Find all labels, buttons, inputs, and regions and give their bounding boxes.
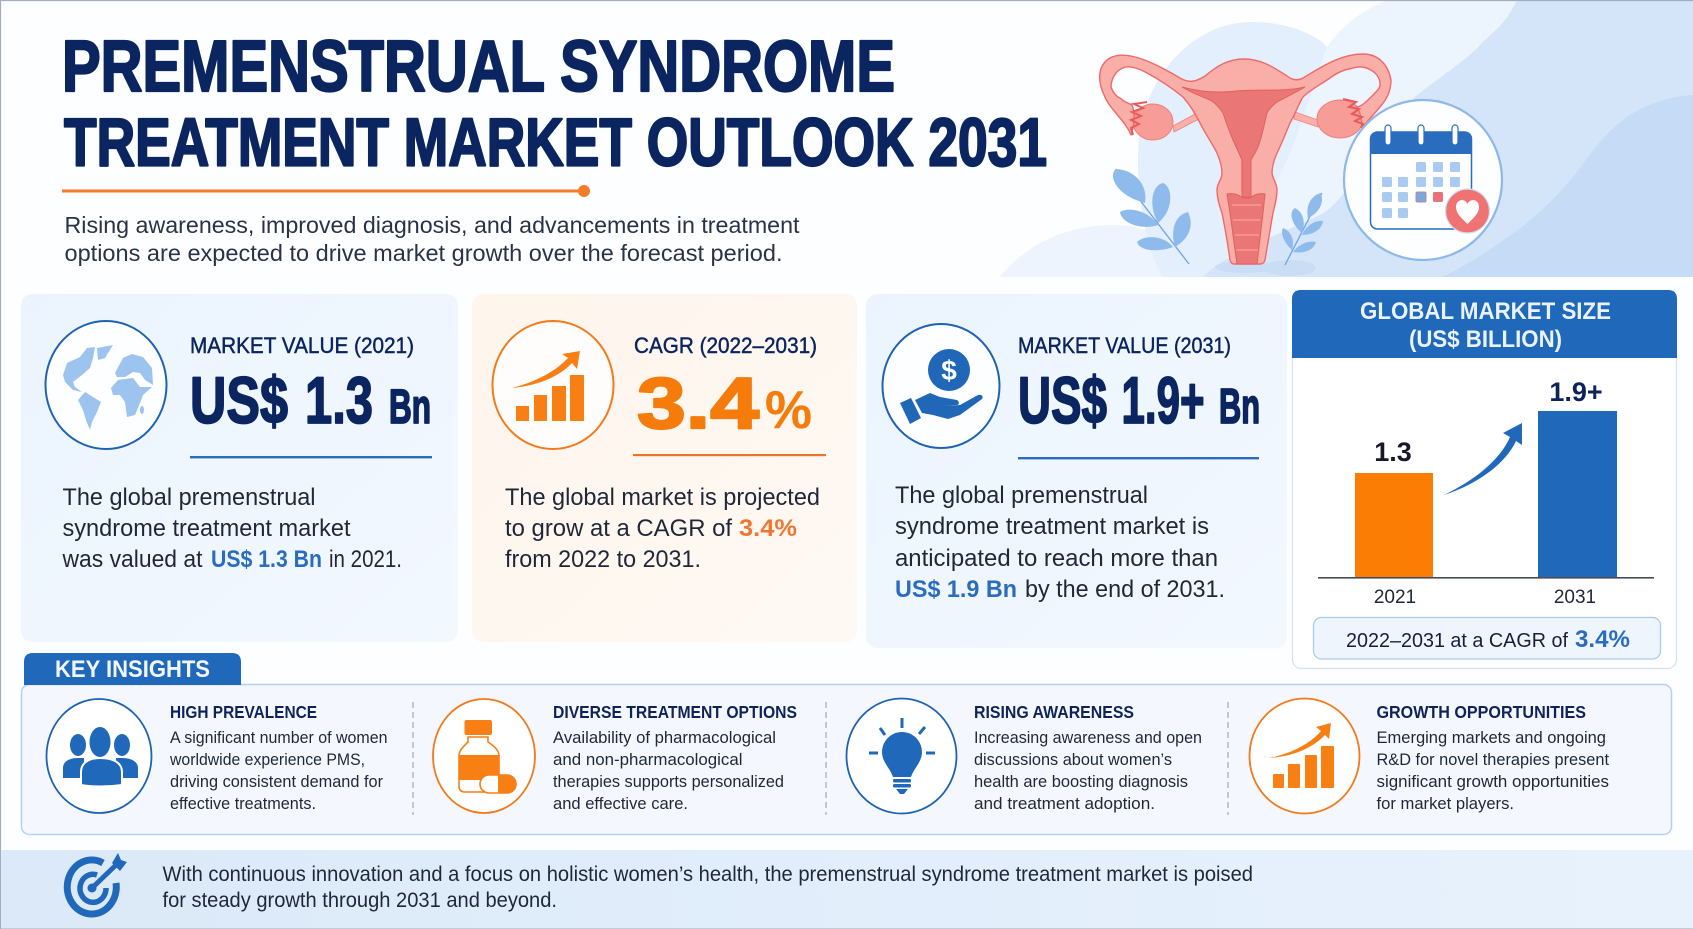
illustration: leaves <box>1113 169 1323 265</box>
title underline with dot <box>62 185 590 197</box>
bar chart: 1.9+ <box>1549 377 1603 407</box>
conclusion text <box>162 863 1253 912</box>
insight: high prevalence <box>46 699 388 813</box>
text <box>553 729 784 813</box>
description: syndrome treatment market is <box>895 513 1209 540</box>
icon: light bulb <box>846 698 956 814</box>
text: driving consistent demand for <box>170 773 383 791</box>
icon: target with arrow <box>67 853 127 914</box>
value: 3.4 <box>637 364 759 444</box>
CAGR badge <box>1314 618 1660 659</box>
description <box>62 484 402 573</box>
text: and treatment adoption. <box>974 795 1155 813</box>
description: from 2022 to 2031. <box>505 546 701 573</box>
text: A significant number of women <box>170 729 388 747</box>
CAGR badge: 2022–2031 at a CAGR of <box>1346 630 1568 652</box>
text: and non-pharmacological <box>553 751 742 769</box>
bar chart: 2021 <box>1374 587 1416 608</box>
insight: rising awareness: RISING AWARENESS <box>974 702 1134 722</box>
illustration: calendar with heart <box>1344 100 1502 260</box>
description <box>895 482 1225 603</box>
text <box>1376 729 1609 813</box>
description: to grow at a CAGR of <box>505 515 732 542</box>
bar chart <box>1318 377 1654 608</box>
panel: CAGR <box>472 294 857 642</box>
value <box>1018 363 1260 437</box>
chart header: (US$ BILLION) <box>1409 326 1562 353</box>
illustration: uterus <box>1100 54 1391 276</box>
value: 1.9+ <box>1122 363 1204 437</box>
value: % <box>765 381 812 440</box>
description: US$ 1.3 Bn <box>211 546 322 573</box>
CAGR badge: 3.4% <box>1575 626 1630 653</box>
description: anticipated to reach more than <box>895 545 1218 572</box>
subtitle <box>64 212 800 266</box>
text: health are boosting diagnosis <box>974 773 1188 791</box>
text: R&D for novel therapies present <box>1376 751 1609 769</box>
text: Emerging markets and ongoing <box>1376 729 1606 747</box>
conclusion text: With continuous innovation and a focus on holistic women’s health, the premenstrual syndrome treatment market is poised <box>162 863 1253 886</box>
icon: growth chart <box>1250 698 1360 814</box>
title: PREMENSTRUAL SYNDROME <box>62 26 895 107</box>
insight: diverse treatment options: DIVERSE TREATMENT OPTIONS <box>553 702 797 722</box>
insight: diverse treatment options <box>433 699 797 813</box>
insight: rising awareness <box>846 698 1202 814</box>
description: US$ 1.9 Bn <box>895 576 1017 603</box>
text: Increasing awareness and open <box>974 729 1202 747</box>
panel: key insights <box>22 653 1672 834</box>
description: 3.4% <box>739 515 797 542</box>
conclusion text: for steady growth through 2031 and beyond. <box>162 889 557 912</box>
bar chart: 1.3 <box>1374 437 1412 467</box>
text: Availability of pharmacological <box>553 729 776 747</box>
subtitle: Rising awareness, improved diagnosis, and advancements in treatment <box>64 212 800 238</box>
chart header: GLOBAL MARKET SIZE <box>1360 298 1611 325</box>
text: worldwide experience PMS, <box>169 751 365 769</box>
value: Bn <box>1219 380 1260 434</box>
label: MARKET VALUE (2031) <box>1018 333 1231 358</box>
title <box>62 26 1047 180</box>
bar chart: 2031 <box>1554 587 1596 608</box>
insight: high prevalence: HIGH PREVALENCE <box>170 702 317 722</box>
description: by the end of 2031. <box>1025 576 1225 603</box>
value: 1.3 <box>305 363 373 437</box>
text: effective treatments. <box>170 795 316 813</box>
subtitle: options are expected to drive market growth over the forecast period. <box>64 240 782 266</box>
text: significant growth opportunities <box>1376 773 1609 791</box>
description: The global premenstrual <box>895 482 1148 509</box>
text: and effective care. <box>553 795 688 813</box>
value: US$ <box>190 363 288 437</box>
panel: market value 2021 <box>21 294 458 642</box>
icon: globe <box>46 321 166 449</box>
label: CAGR (2022–2031) <box>634 333 817 358</box>
description: syndrome treatment market <box>62 515 351 542</box>
chart header <box>1292 290 1677 358</box>
text <box>169 729 388 813</box>
icon: hand with coin: $ <box>941 355 957 386</box>
icon: hand with coin <box>882 324 1000 448</box>
key insights tab: KEY INSIGHTS <box>55 656 210 683</box>
description: The global market is projected <box>505 484 820 511</box>
panel: market value 2031 <box>866 294 1287 648</box>
panel: global market size chart <box>1292 290 1677 668</box>
icon: growth chart <box>492 321 614 449</box>
label: MARKET VALUE (2021) <box>190 333 414 358</box>
icon: medicine bottle <box>433 699 535 813</box>
text: therapies supports personalized <box>553 773 784 791</box>
hero background waves <box>1000 0 1693 277</box>
title: TREATMENT MARKET OUTLOOK 2031 <box>64 104 1047 180</box>
insight: growth opportunities: GROWTH OPPORTUNITIES <box>1376 702 1586 722</box>
description: The global premenstrual <box>62 484 316 511</box>
insight: growth opportunities <box>1250 698 1609 814</box>
key insights tab <box>24 653 241 685</box>
value <box>190 363 431 437</box>
value: Bn <box>389 381 431 434</box>
text: for market players. <box>1376 795 1514 813</box>
description <box>505 484 820 573</box>
text: discussions about women’s <box>974 751 1172 769</box>
text <box>974 729 1202 813</box>
value <box>637 364 812 444</box>
footer band <box>1 850 1693 928</box>
description: in 2021. <box>329 546 402 573</box>
value: US$ <box>1018 363 1107 437</box>
arrow <box>1444 423 1522 495</box>
icon: people <box>46 699 152 813</box>
description: was valued at <box>62 546 203 573</box>
